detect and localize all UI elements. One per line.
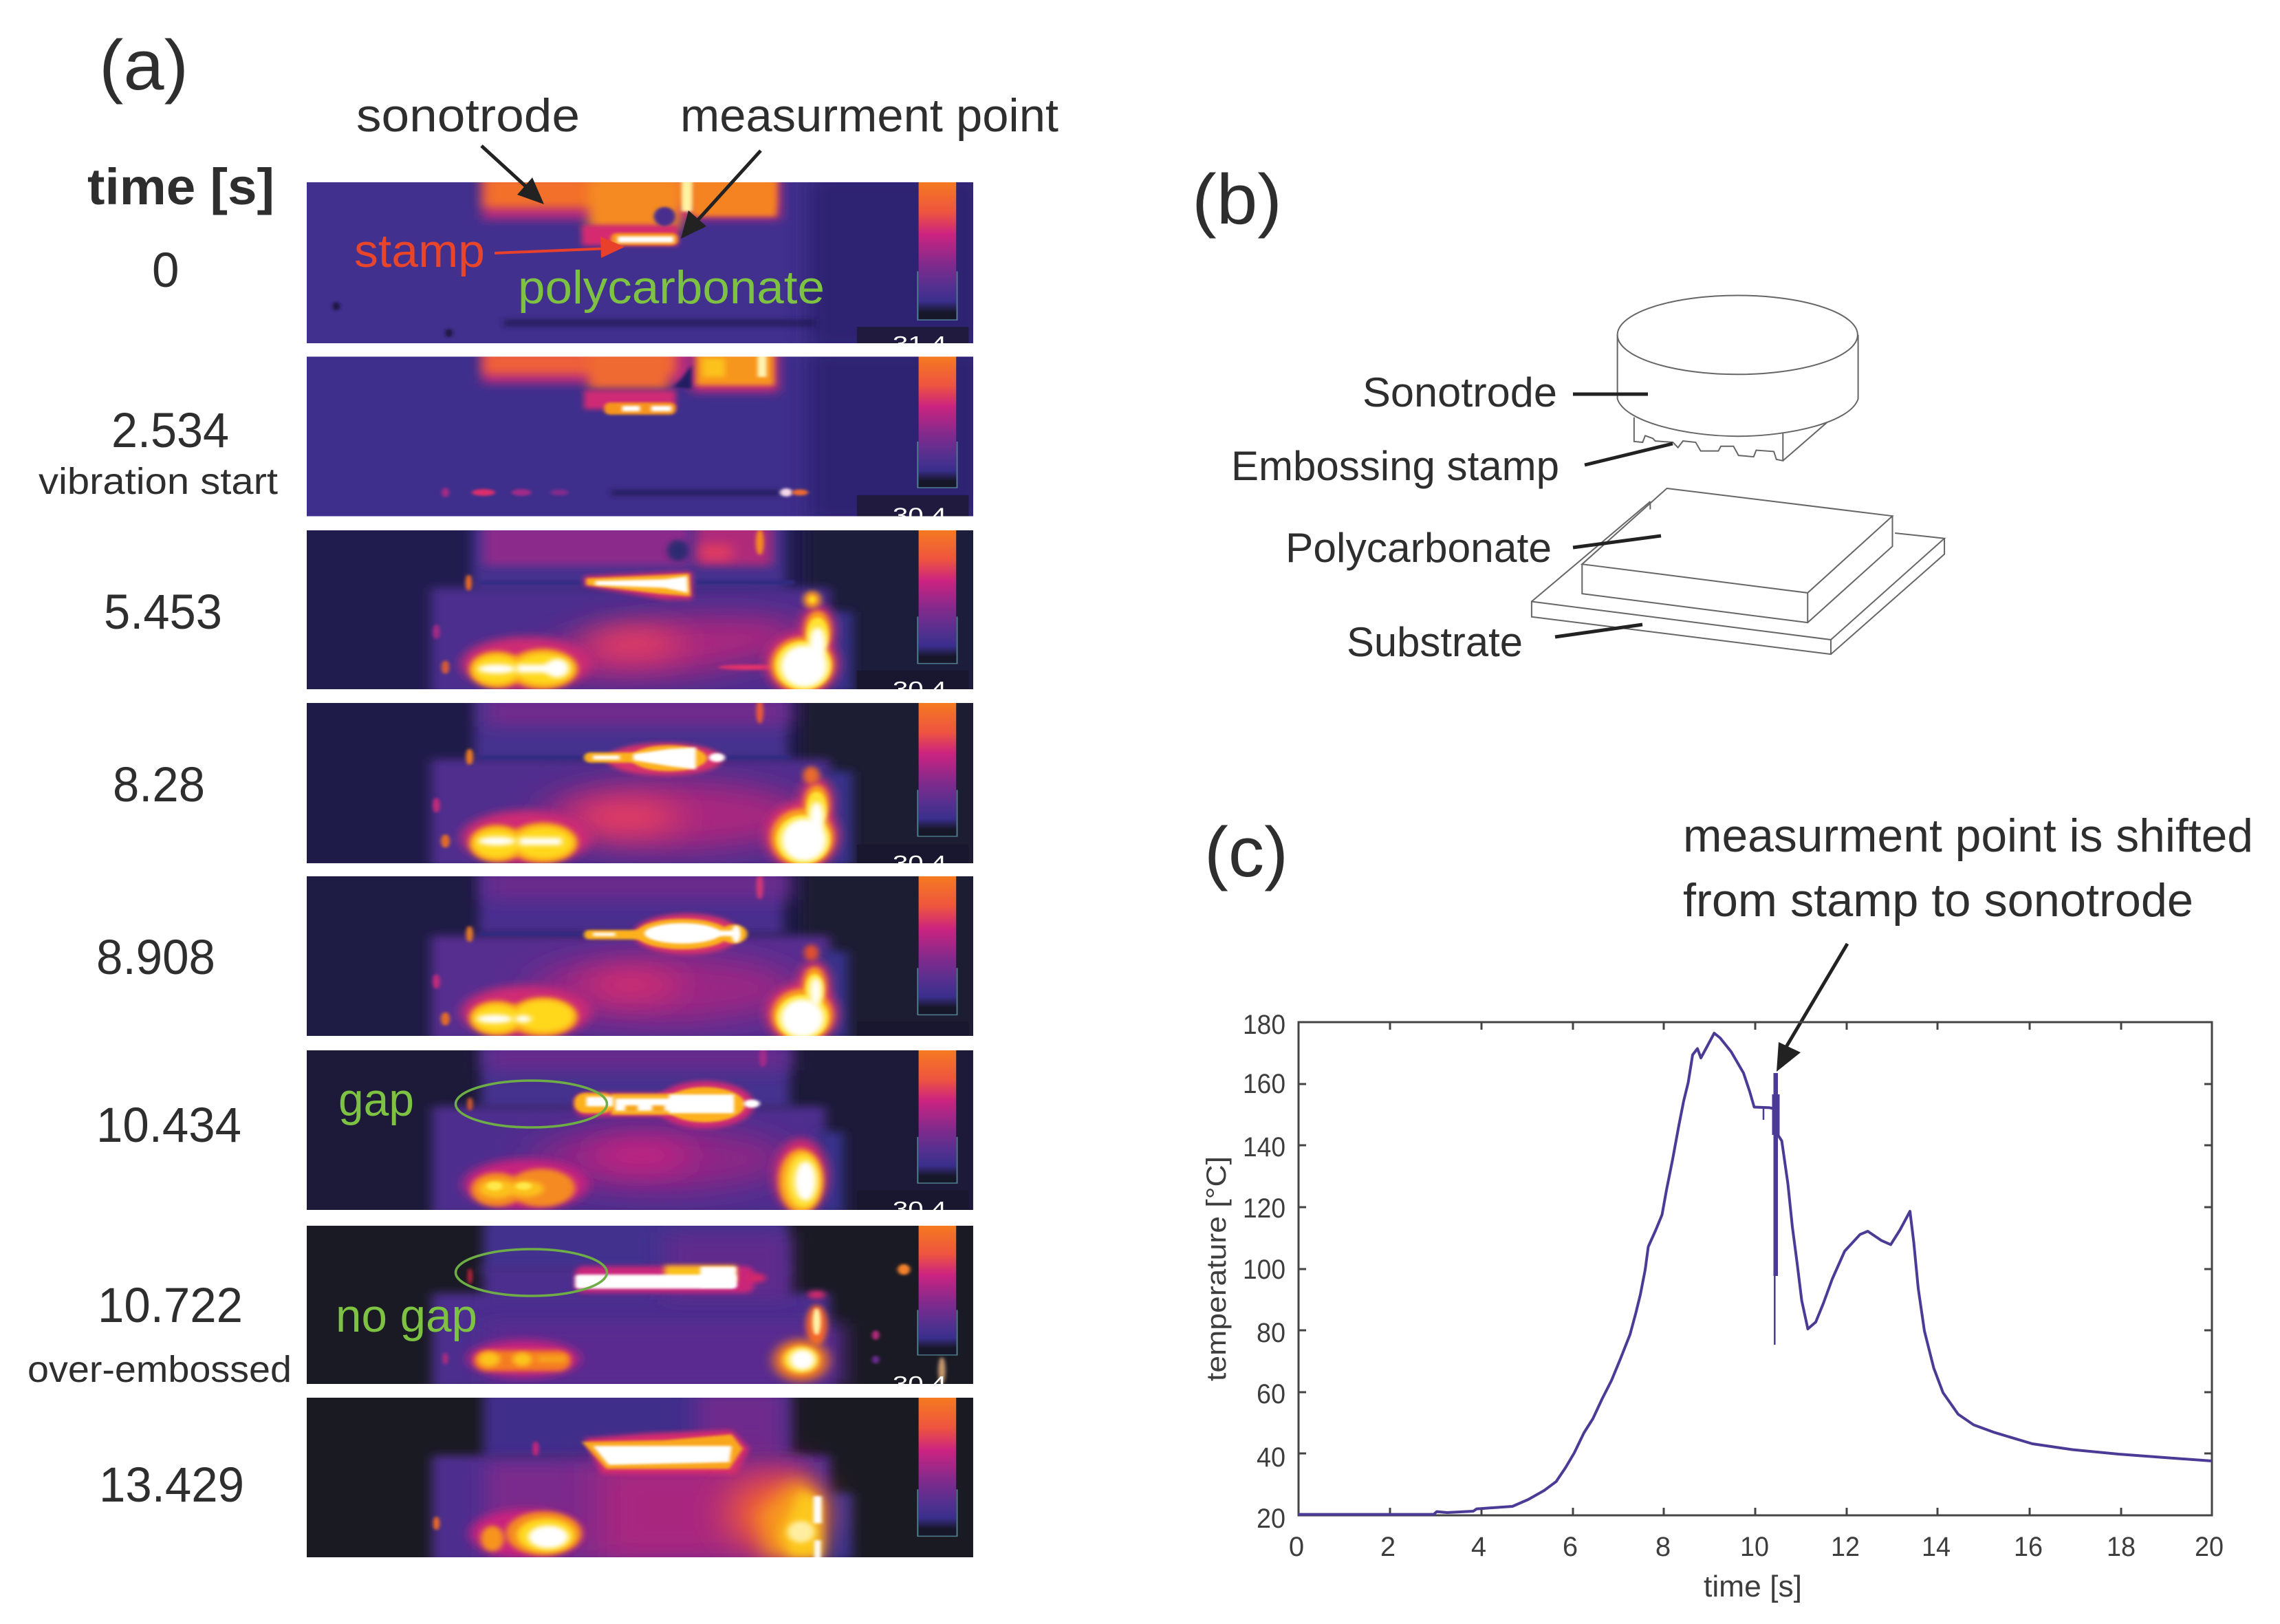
scale readout: 30.4 (893, 851, 946, 875)
scale readout (857, 1201, 968, 1210)
time 5.453: 5.453 (104, 585, 222, 640)
arrow: measurement point (681, 151, 761, 239)
y axis tick labels: 160 (1243, 1069, 1285, 1099)
label: sonotrode: sonotrode (356, 89, 580, 142)
schematic: sonotrode, stamp, polycarbonate and substrate (1532, 295, 1944, 654)
scale readout (857, 671, 968, 689)
colorbar (918, 356, 957, 488)
y axis tick labels: 120 (1243, 1193, 1285, 1224)
chart: temperature over time (1202, 1010, 2224, 1603)
scale readout: 31.4 (893, 332, 946, 356)
scale readout (857, 327, 968, 343)
colorbar (918, 1226, 957, 1355)
sonotrode cylinder (1618, 295, 1858, 436)
x axis tick labels: 16 (2014, 1532, 2043, 1562)
thermal frame t=8.908 (307, 876, 973, 1036)
y axis tick labels: 80 (1257, 1318, 1285, 1348)
time 2.534: 2.534 (111, 404, 229, 458)
callout text: measurment point is shifted (1683, 810, 2253, 862)
x axis tick labels (1289, 1532, 2224, 1562)
time 0: 0 (152, 243, 179, 298)
polycarbonate block (1582, 488, 1893, 622)
y axis tick labels: 100 (1243, 1255, 1285, 1285)
thermal frame t=2.534 (307, 356, 973, 516)
annotation ellipse: no gap (455, 1249, 607, 1296)
x axis tick labels: 12 (1831, 1532, 1860, 1562)
substrate plate (1532, 501, 1944, 654)
label: measurement point: measurment point (680, 89, 1058, 142)
y axis tick labels: 20 (1257, 1504, 1285, 1534)
scale readout (857, 495, 968, 516)
arrow: callout to spike (1777, 944, 1847, 1072)
callout text (1683, 810, 2253, 927)
time 13.429: 13.429 (99, 1458, 244, 1513)
label: Substrate (1347, 619, 1642, 665)
embossing stamp (1634, 418, 1827, 461)
note: vibration start: vibration start (39, 461, 278, 502)
label: Embossing stamp: Embossing stamp (1231, 443, 1559, 489)
thermal frame t=13.429 (307, 1391, 973, 1564)
colorbar (918, 530, 957, 664)
time 10.722: 10.722 (98, 1279, 243, 1333)
time 8.28: 8.28 (113, 758, 205, 812)
y axis tick labels: 60 (1257, 1379, 1285, 1409)
x axis title: time [s] (1704, 1570, 1802, 1603)
arrow: sonotrode (481, 146, 544, 204)
plot frame and ticks (1299, 1022, 2212, 1515)
arrow: stamp (495, 237, 625, 258)
y axis title: temperature [°C] (1202, 1156, 1232, 1381)
thermal frame t=10.722 (307, 1226, 973, 1384)
column heading: time [s]: time [s] (87, 158, 274, 215)
x axis tick labels: 18 (2107, 1532, 2136, 1562)
x axis tick labels: 4 (1471, 1532, 1486, 1562)
label: Polycarbonate: Polycarbonate (1285, 525, 1552, 571)
label: no gap: no gap (336, 1290, 477, 1342)
scale readout: 30.4 (893, 504, 946, 527)
time 10.434: 10.434 (96, 1098, 241, 1153)
scale readout (857, 845, 944, 863)
x axis tick labels: 8 (1655, 1532, 1671, 1562)
x axis tick labels: 6 (1563, 1532, 1578, 1562)
label: polycarbonate: polycarbonate (518, 261, 825, 314)
label: Sonotrode: Sonotrode (1362, 369, 1557, 415)
y axis tick labels: 140 (1243, 1132, 1285, 1162)
x axis tick labels: 20 (2195, 1532, 2224, 1562)
y axis tick labels: 180 (1243, 1010, 1285, 1040)
thermal frame t=0 (307, 182, 973, 343)
panel label (a): (a) (99, 25, 188, 105)
callout text: from stamp to sonotrode (1683, 874, 2193, 927)
colorbar (918, 703, 957, 836)
scale readout: 30.4 (893, 1198, 946, 1221)
x axis tick labels: 14 (1922, 1532, 1951, 1562)
x axis tick labels: 2 (1380, 1532, 1396, 1562)
thermal frame t=5.453 (307, 530, 973, 689)
temperature curve (1299, 1033, 2212, 1515)
colorbar (918, 182, 957, 320)
thermal frame t=10.434 (307, 1043, 973, 1221)
y axis tick labels: 40 (1257, 1442, 1285, 1473)
note: over-embossed: over-embossed (28, 1349, 292, 1390)
time 8.908: 8.908 (96, 931, 215, 985)
scale readout: 30.4 (893, 1372, 946, 1396)
panel label (c): (c) (1204, 812, 1288, 891)
thermal frame t=8.28 (307, 703, 973, 863)
y axis tick labels (1243, 1010, 1285, 1534)
panel label (b): (b) (1192, 160, 1282, 239)
label: Substrate: Substrate (1347, 619, 1523, 665)
annotation ellipse: gap (455, 1081, 607, 1127)
colorbar (918, 1398, 957, 1536)
label: gap: gap (338, 1074, 414, 1126)
x axis tick labels: 0 (1289, 1532, 1304, 1562)
colorbar (918, 1050, 957, 1183)
scale readout: 30.4 (893, 678, 946, 701)
scale readout (857, 1021, 968, 1039)
time values column (28, 243, 292, 1513)
x axis tick labels: 10 (1740, 1532, 1769, 1562)
label: stamp: stamp (354, 225, 485, 277)
colorbar (918, 876, 957, 1015)
